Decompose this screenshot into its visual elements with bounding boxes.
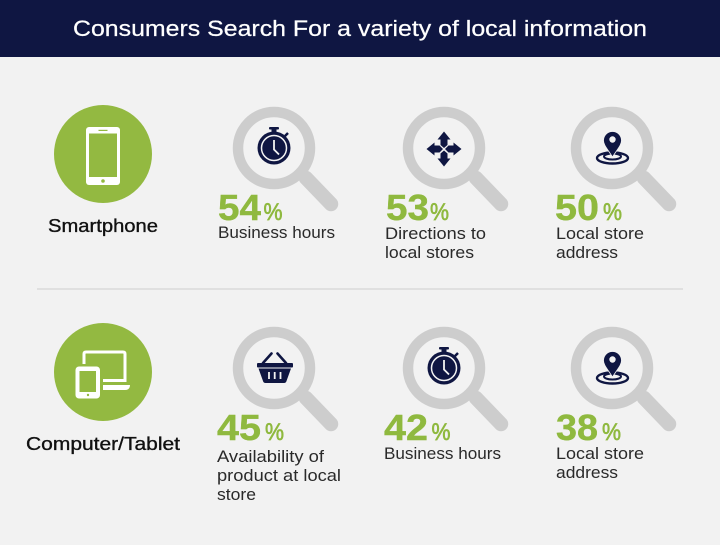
stat: 45% availability <box>217 332 341 504</box>
panel: smartphone category <box>48 105 158 236</box>
stat: 53% directions <box>385 112 501 262</box>
stat: 45% availability: product at local <box>217 467 341 485</box>
label: Local store <box>556 225 644 243</box>
heading: Smartphone: Smartphone <box>48 215 158 236</box>
stat: 45% availability: % <box>265 419 284 446</box>
icon: magnifier with stopwatch <box>408 332 501 424</box>
panel: computer/tablet category <box>26 323 180 454</box>
value: 38 <box>556 407 598 448</box>
stat: 53% directions: local stores <box>385 244 474 262</box>
icon: magnifier with map pin <box>576 332 669 424</box>
icon: magnifier with stopwatch <box>238 112 331 204</box>
stat: 54% business hours: % <box>264 199 282 226</box>
icon: laptop and tablet <box>54 323 152 421</box>
stat: 38% local store address: address <box>556 464 618 482</box>
value: 42 <box>384 407 428 448</box>
value: 54 <box>218 187 261 228</box>
stat: 50% local store address <box>555 112 669 262</box>
stat: 50% local store address: address <box>556 244 618 262</box>
label: Directions to <box>385 225 486 243</box>
label: Local store <box>556 445 644 463</box>
header banner <box>0 0 720 57</box>
heading: Computer/Tablet: Computer/Tablet <box>26 433 180 454</box>
stat: 42% business hours <box>384 332 501 463</box>
stat: 54% business hours <box>218 112 335 242</box>
icon: magnifier with map pin <box>576 112 669 204</box>
stat: 45% availability: store <box>217 486 256 504</box>
stat: 53% directions: % <box>430 199 449 226</box>
stat: 42% business hours: % <box>432 419 450 446</box>
stat: 50% local store address: % <box>603 199 622 226</box>
value: 53 <box>386 187 429 228</box>
label: Availability of <box>217 448 324 466</box>
stat: 38% local store address: % <box>602 419 621 446</box>
stat: 38% local store address <box>556 332 669 482</box>
value: 45 <box>217 407 261 448</box>
label: Business hours <box>384 445 501 463</box>
icon: magnifier with basket <box>238 332 331 424</box>
label: Business hours <box>218 224 335 242</box>
icon: magnifier with arrows <box>408 112 501 204</box>
title: Consumers Search For a variety of local information <box>73 16 647 41</box>
value: 50 <box>555 187 599 228</box>
icon: smartphone <box>54 105 152 203</box>
